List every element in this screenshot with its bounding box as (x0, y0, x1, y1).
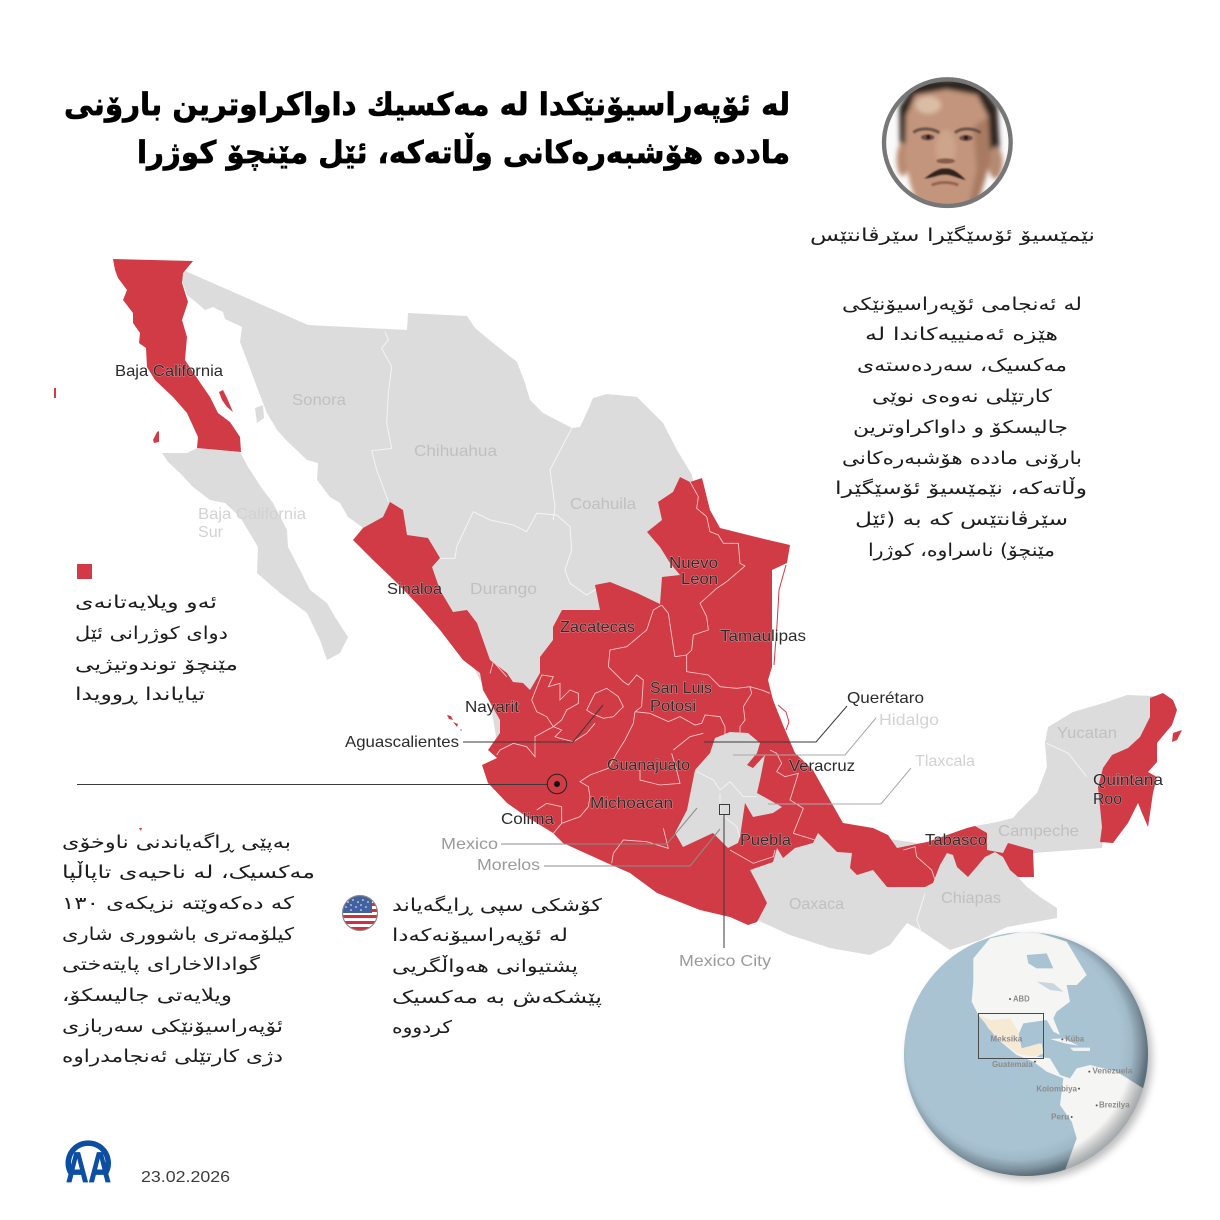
legend (75, 564, 238, 705)
state labels: Sur (198, 524, 224, 541)
icon: US flag (342, 895, 378, 931)
location marker (547, 774, 567, 794)
text block: White House statement: کۆشکی سپی ڕایگەیاند (392, 895, 603, 916)
state labels: Zacatecas (560, 619, 635, 636)
state labels: Tlaxcala (915, 753, 975, 770)
globe locator box (978, 1014, 1044, 1058)
title: لە ئۆپەراسیۆنێکدا لە مەكسیك داواکراوترین بارۆنی (64, 87, 790, 123)
text block: location of operation: دژی کارتێلی ئەنجامدراوە (62, 1047, 283, 1067)
text block: operation summary: کارتێلی نەوەی نوێی (872, 387, 1053, 407)
state labels: San Luis (650, 680, 712, 697)
state labels: Sonora (292, 392, 346, 409)
text block: location of operation: گوادالاخارای پایتەختی (62, 954, 261, 975)
state labels: Puebla (740, 832, 791, 849)
text block: operation summary (835, 295, 1087, 561)
text block: operation summary: جالیسکۆ و داواکراوترین (853, 418, 1068, 438)
state labels: Nuevo (669, 555, 718, 572)
globe labels: Guatemala (992, 1060, 1033, 1069)
state labels: Querétaro (847, 690, 924, 707)
title: مادده هۆشبەرەکانی وڵاتەکە، ئێل مێنچۆ کوژرا (137, 133, 790, 171)
state labels: Aguascalientes (345, 734, 459, 751)
state labels: Campeche (998, 823, 1079, 840)
text block: operation summary: سێرڤانتێس کە بە (ئێل (855, 510, 1068, 530)
gray silhouette of Mexico (162, 270, 1160, 955)
legend text: دوای کوژرانی ئێل (75, 624, 228, 644)
state labels: Colima (501, 811, 554, 828)
state labels: Tabasco (925, 832, 987, 849)
title (64, 87, 790, 171)
text block: White House statement: پێشکەش بە مەکسیک (392, 988, 602, 1008)
state labels: Nayarit (465, 699, 520, 716)
text block: operation summary: وڵاتەکە، نێمێسیۆ ئۆسێگێرا (835, 477, 1087, 499)
legend text: مێنچۆ توندوتیژیی (75, 655, 238, 675)
state labels: Durango (470, 581, 537, 598)
state labels: Michoacan (590, 795, 673, 812)
text block: location of operation: ئۆپەراسیۆنێکی سەربازی (62, 1017, 283, 1037)
date: 23.02.2026 (141, 1169, 230, 1186)
state labels: Baja California (115, 363, 223, 380)
gray state borders (372, 332, 392, 502)
coastal lagoon strips (774, 565, 789, 730)
person name: نێمێسیۆ ئۆسێگێرا سێرڤانتێس (810, 225, 1095, 246)
globe labels: Küba (1065, 1035, 1085, 1044)
state labels: Yucatan (1057, 725, 1117, 742)
map of Mexico (54, 259, 1182, 970)
state labels: Morelos (477, 857, 540, 874)
globe labels: ABD (1013, 994, 1030, 1003)
globe labels: Peru (1051, 1112, 1069, 1121)
text block: operation summary: هێزە ئەمنییەکاندا لە (865, 325, 1058, 345)
state labels: Roo (1093, 791, 1122, 808)
globe labels: Brezilya (1099, 1100, 1130, 1109)
state labels: Coahuila (570, 496, 636, 513)
state labels: Sinaloa (387, 581, 442, 598)
legend swatch (77, 564, 92, 579)
state labels: Potosi (650, 698, 696, 715)
state labels: Mexico City (679, 953, 771, 970)
globe labels: Meksika (990, 1035, 1023, 1044)
white state borders on red (490, 482, 815, 863)
red states (54, 259, 1182, 925)
text block: operation summary: بارۆنی مادده هۆشبەرەکانی (842, 449, 1082, 469)
state labels: Guanajuato (607, 757, 690, 774)
text block: location of operation: ویلایەتی جالیسکۆ، (62, 986, 232, 1006)
globe labels: Venezuela (1092, 1067, 1133, 1076)
text block: White House statement: پشتیوانی هەواڵگریی (392, 955, 578, 977)
state labels: Chiapas (941, 890, 1001, 907)
text block: location of operation (62, 832, 315, 1067)
text block: location of operation: کە دەکەوێتە نزیکەی ١٣٠ (62, 894, 295, 914)
text block: location of operation: مەکسیک، لە ناحیەی تاپاڵپا (62, 861, 315, 883)
text block: White House statement (392, 895, 603, 1038)
legend text (75, 593, 238, 705)
state labels: Tamaulipas (720, 628, 806, 645)
state labels: Chihuahua (414, 443, 497, 460)
state labels: Quintana (1093, 772, 1163, 789)
text block: White House statement: لە ئۆپەراسیۆنەکەدا (392, 926, 568, 946)
text block: location of operation: کیلۆمەتری باشووری شاری (62, 925, 295, 945)
text block: operation summary: مێنچۆ) ناسراوە، کوژرا (868, 541, 1055, 561)
state labels: Veracruz (789, 758, 855, 775)
central gray states (675, 732, 782, 848)
locator globe (904, 930, 1152, 1180)
state labels: Baja California (198, 506, 306, 523)
state labels (115, 363, 1163, 970)
leader lines (77, 705, 911, 948)
state labels: Oaxaca (789, 896, 844, 913)
logo: Anadolu Agency: AA (66, 1144, 111, 1192)
text block: operation summary: مەکسیک، سەردەستەی (857, 356, 1067, 376)
state labels: Hidalgo (879, 712, 939, 729)
legend text: تیایاندا ڕوویدا (75, 685, 205, 705)
legend text: ئەو ویلایەتانەی (75, 593, 217, 613)
globe labels (990, 994, 1133, 1121)
text block: location of operation: بەپێی ڕاگەیاندنی ناوخۆی (62, 832, 291, 853)
globe labels: Kolombiya (1036, 1084, 1078, 1093)
portrait photo (884, 78, 1011, 213)
text block: White House statement: کردووە (392, 1018, 453, 1038)
state labels: Leon (681, 571, 718, 588)
state labels: Mexico (441, 836, 498, 853)
text block: operation summary: لە ئەنجامی ئۆپەراسیۆنێکی (842, 295, 1082, 315)
